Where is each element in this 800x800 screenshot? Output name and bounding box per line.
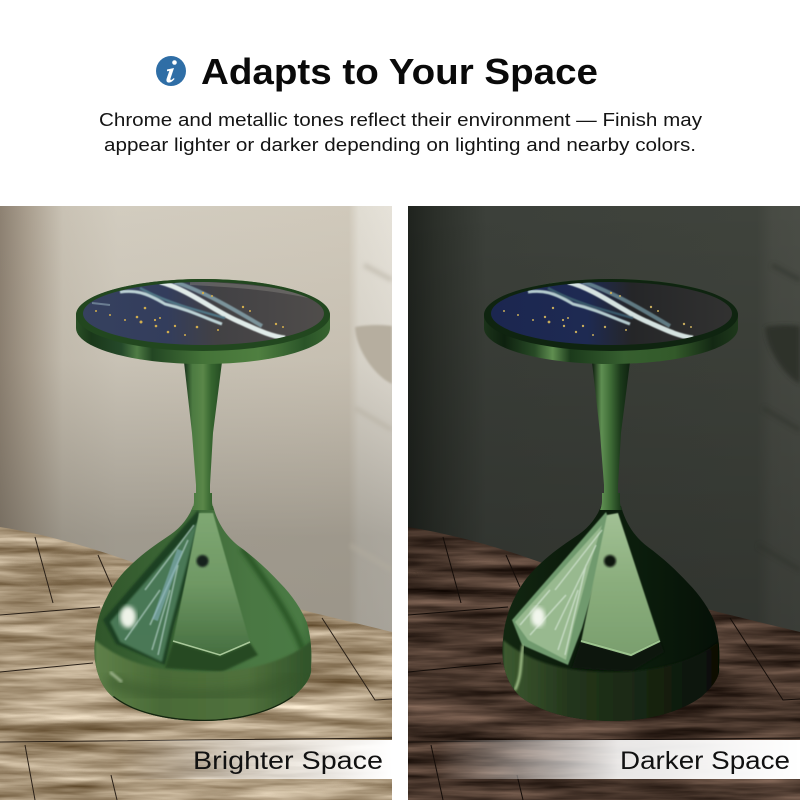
marble glass top [488,280,736,348]
label strip: darker space: Darker Space [620,747,790,775]
table base dome [502,506,720,721]
table: brighter finish [76,279,330,725]
rim upper lip [76,279,330,351]
label strip: brighter space: Brighter Space [193,747,383,775]
floor: dark wood [408,527,800,800]
description text: appear lighter or darker depending on lighting and nearby colors. [104,135,696,155]
wall: brighter room [0,206,392,646]
wall: darker room [408,206,800,646]
table stem [592,362,630,510]
title: Adapts to Your Space [201,51,598,92]
icon: info circle [156,56,186,86]
table: darker finish [484,279,738,725]
marble glass top [80,280,328,348]
floor: light wood [0,527,392,800]
description text [99,110,702,155]
panel: brighter space [0,206,392,800]
label strip: darker space [436,740,800,779]
table stem [184,362,222,510]
rim upper lip [484,279,738,351]
panel: darker space [408,206,800,800]
table base dome [94,506,312,721]
table top rim [484,279,738,364]
description text: Chrome and metallic tones reflect their environment — Finish may [99,110,702,130]
table top rim [76,279,330,364]
label strip: brighter space [120,740,392,779]
